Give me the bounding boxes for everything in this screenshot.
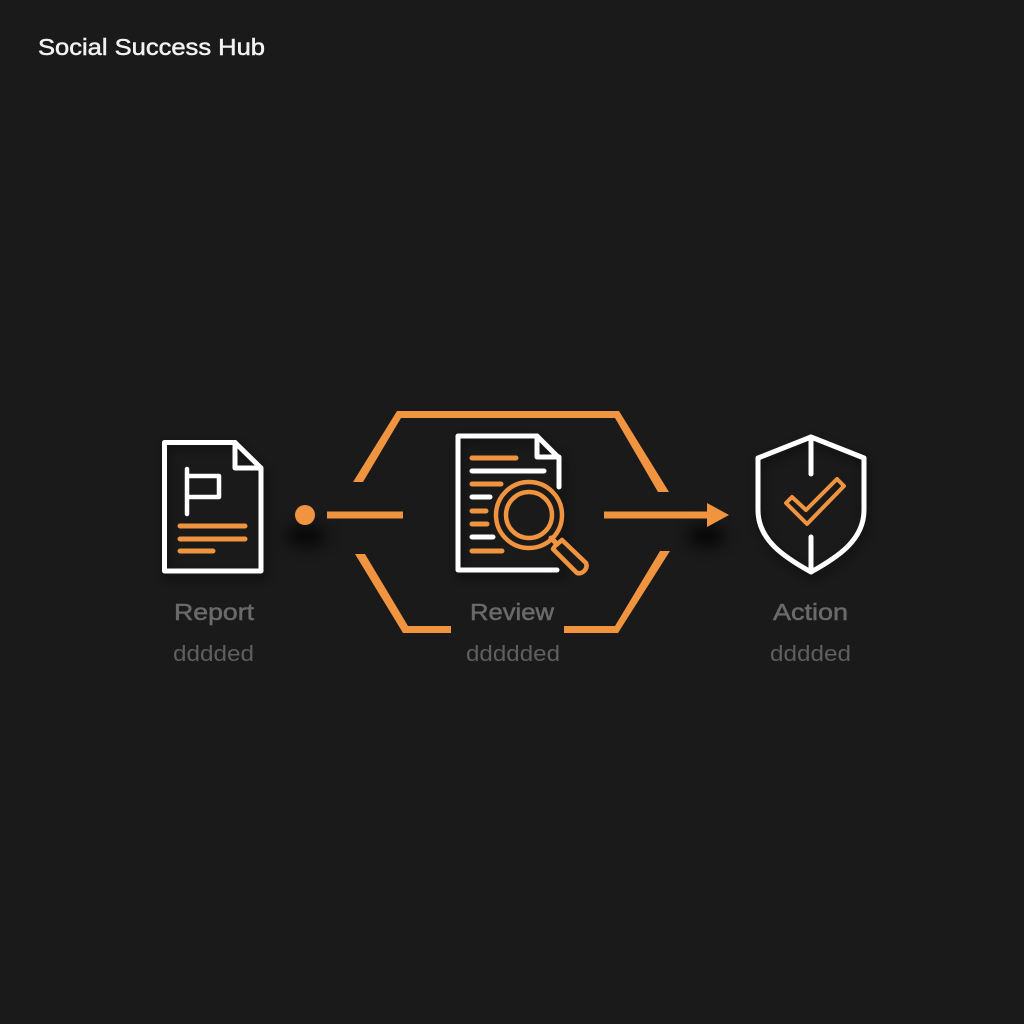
connector: line into review: [327, 512, 403, 518]
label: review: ddddded: [466, 641, 560, 666]
frame: hexagon around review: [353, 411, 670, 633]
label: report: Report: [174, 599, 255, 625]
label: action: [770, 599, 851, 666]
icon: shield with check: [758, 437, 866, 577]
label: action: Action: [773, 599, 848, 625]
icon: review document with magnifier: [458, 436, 587, 575]
icon: report document with flag: [164, 442, 264, 577]
title: Social Success Hub: [38, 34, 265, 60]
label: report: dddded: [173, 641, 254, 666]
label: review: [466, 599, 560, 666]
label: action: dddded: [770, 641, 851, 666]
connector: start dot: [286, 505, 326, 546]
arrow: review to action: [604, 503, 729, 546]
label: report: [173, 599, 255, 666]
label: review: Review: [470, 599, 554, 625]
